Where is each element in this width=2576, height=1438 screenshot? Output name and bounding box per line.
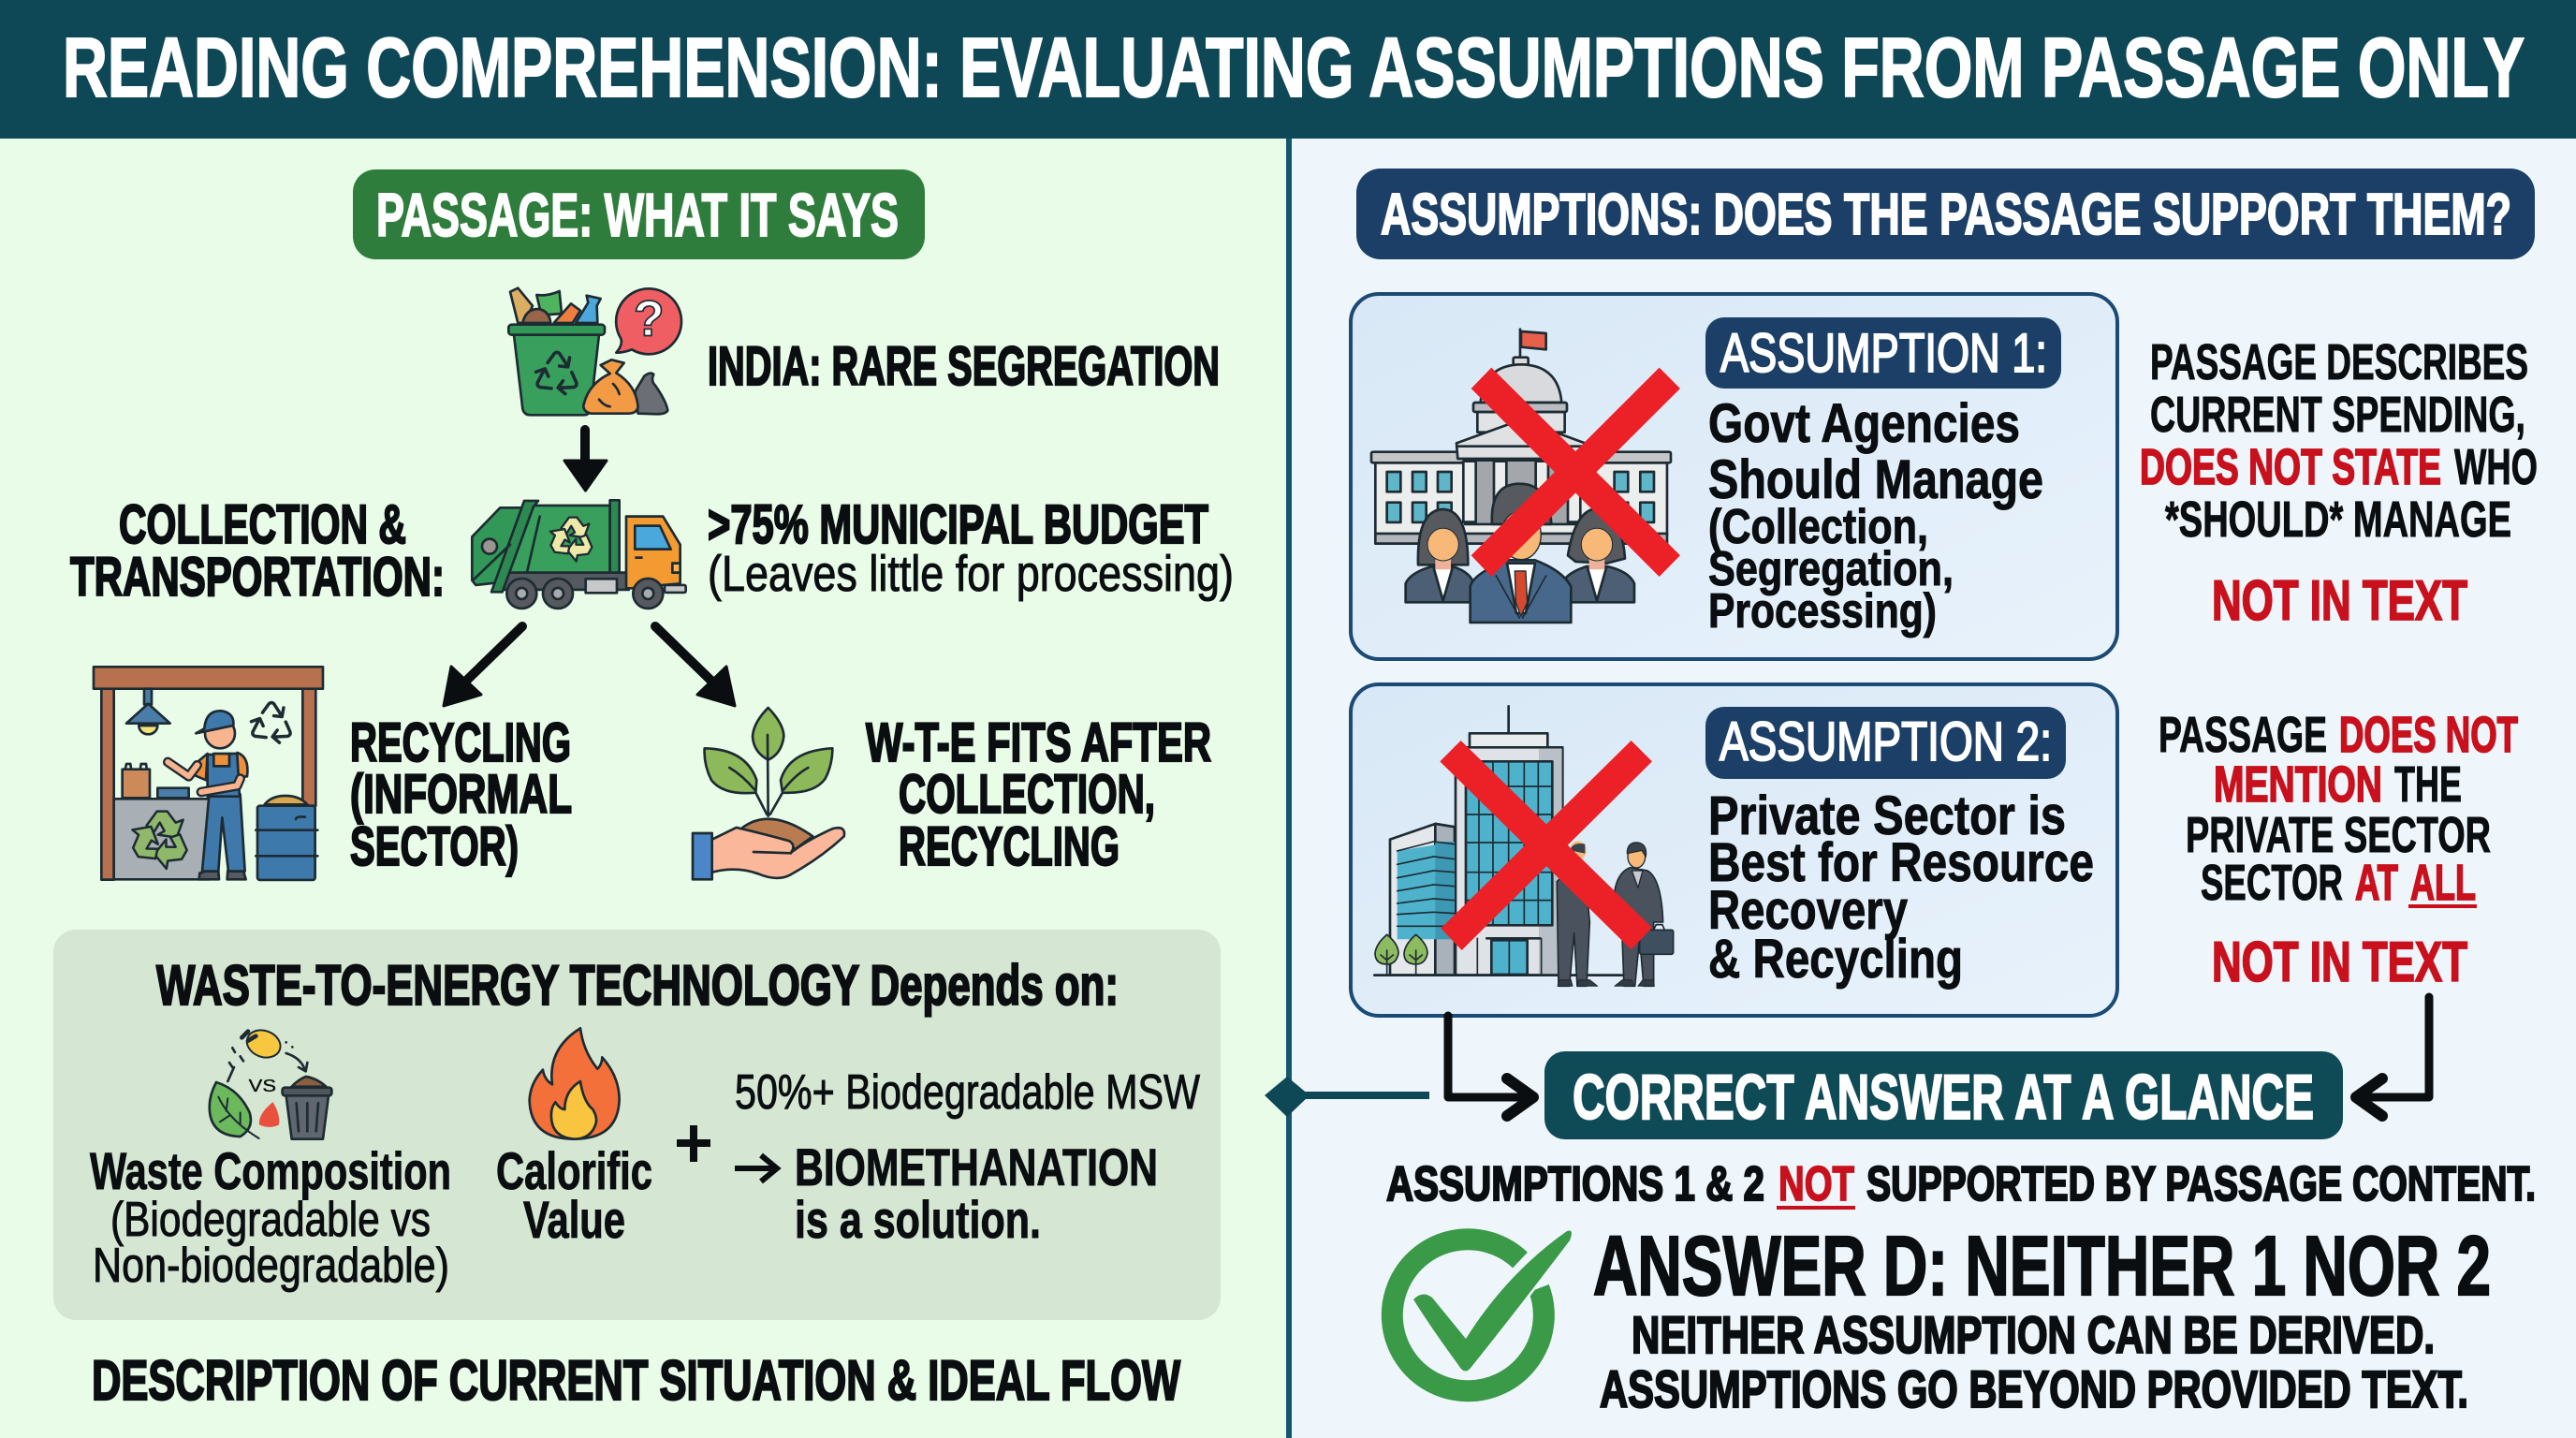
text: recycling informal sector: RECYCLING — [350, 712, 571, 773]
card: assumption 2 — [1351, 684, 2117, 1016]
text: answer explanation — [1600, 1305, 2468, 1418]
text: verdict on assumption 2: AT — [2355, 855, 2398, 911]
text: verdict on assumption 1: WHO — [2454, 439, 2538, 495]
label: collection and transportation — [70, 494, 445, 608]
text: municipal budget — [708, 494, 1234, 602]
text: assumptions not supported — [1386, 1157, 2536, 1211]
panel: assumptions — [1351, 169, 2538, 1418]
badge: assumption 1 — [1705, 317, 2061, 389]
text: verdict on assumption 2: SECTOR — [2201, 855, 2343, 911]
text: biomethanation solution: is a solution. — [795, 1190, 1041, 1249]
text: assumption 2 statement — [1708, 785, 2094, 990]
heading: waste-to-energy depends on: WASTE-TO-ENERGY TECHNOLOGY Depends on: — [156, 954, 1119, 1017]
text: recycling informal sector: SECTOR) — [350, 816, 519, 877]
text: assumption 2 statement: Private Sector is — [1708, 785, 2066, 846]
passage heading — [353, 169, 925, 259]
icon: government building and officials, crossed out — [1371, 330, 1680, 623]
text: calorific value: Value — [523, 1190, 625, 1249]
text: assumptions not supported: NOT — [1778, 1157, 1854, 1211]
text: waste composition: (Biodegradable vs — [110, 1193, 431, 1247]
arrow: assumption 1 card to answer — [1448, 1016, 1533, 1116]
text: calorific value — [496, 1141, 652, 1249]
text: biomethanation solution — [795, 1137, 1158, 1249]
text: assumption 1 statement: (Collection, — [1708, 500, 1928, 554]
text: municipal budget: >75% MUNICIPAL BUDGET — [708, 494, 1208, 555]
text: waste-to-energy fits after: W-T-E FITS AFTER — [866, 712, 1211, 773]
text: assumption 2 statement: Recovery — [1708, 880, 1908, 941]
icon: waste bin with question bubble — [508, 288, 681, 415]
arrow: bin to truck — [564, 425, 607, 491]
icon: green check mark — [1392, 1230, 1572, 1391]
text: verdict on assumption 2: PASSAGE — [2159, 707, 2327, 763]
arrow: to biomethanation — [735, 1155, 777, 1181]
heading: correct answer at a glance — [1544, 1051, 2343, 1139]
text: verdict on assumption 1 — [2140, 334, 2538, 632]
passage heading: PASSAGE: WHAT IT SAYS — [376, 181, 899, 249]
text: verdict on assumption 2 — [2159, 707, 2518, 993]
text: calorific value: Calorific — [496, 1141, 652, 1200]
icon: waste bin with question bubble: ? — [634, 291, 665, 346]
text: waste composition — [90, 1141, 451, 1293]
text: verdict on assumption 2: ALL — [2410, 855, 2476, 911]
text: waste-to-energy fits after — [866, 712, 1211, 877]
central divider with diamond connector — [1265, 139, 1429, 1438]
icon: flame — [530, 1028, 620, 1139]
text: verdict on assumption 2: THE — [2394, 756, 2462, 813]
text: verdict on assumption 2: MENTION — [2214, 756, 2382, 813]
red cross — [1471, 368, 1680, 577]
not in text tag: NOT IN TEXT — [2212, 569, 2467, 632]
text: assumption 2 statement: & Recycling — [1708, 929, 1963, 990]
red cross — [1440, 741, 1652, 950]
arrow: truck to recycling — [444, 626, 522, 706]
badge: assumption 2 — [1705, 707, 2066, 779]
text: municipal budget: (Leaves little for processing) — [708, 546, 1234, 602]
assumptions heading — [1356, 169, 2535, 259]
title banner — [0, 0, 2576, 139]
text: assumption 1 statement: Should Manage — [1708, 449, 2043, 510]
text: assumption 1 statement — [1708, 393, 2043, 638]
panel: waste-to-energy technology — [53, 930, 1221, 1320]
text: recycling informal sector: (INFORMAL — [350, 764, 572, 825]
label: collection and transportation: TRANSPORTATION: — [70, 547, 445, 608]
icon: biodegradable vs non-biodegradable: VS — [249, 1076, 276, 1095]
text: waste composition: Waste Composition — [90, 1141, 451, 1200]
badge: assumption 2: ASSUMPTION 2: — [1720, 712, 2052, 772]
label: collection and transportation: COLLECTION & — [119, 494, 406, 555]
badge: assumption 1: ASSUMPTION 1: — [1720, 323, 2047, 384]
icon: biodegradable vs non-biodegradable — [210, 1026, 331, 1139]
text: assumptions not supported: ASSUMPTIONS 1 & 2 — [1386, 1157, 1764, 1211]
text: biodegradable MSW threshold: 50%+ Biodegradable MSW — [735, 1065, 1200, 1120]
text: waste-to-energy fits after: COLLECTION, — [899, 764, 1155, 825]
text: biomethanation solution: BIOMETHANATION — [795, 1137, 1158, 1196]
text: assumption 1 statement: Segregation, — [1708, 542, 1954, 596]
icon: corporate office and businessmen, crossed out — [1374, 706, 1674, 986]
icon: garbage truck — [472, 500, 686, 609]
card: assumption 1 — [1351, 294, 2117, 659]
arrow: verdict to answer — [2356, 997, 2429, 1116]
text: india rare segregation: INDIA: RARE SEGREGATION — [708, 336, 1220, 397]
text: verdict on assumption 1: DOES NOT STATE — [2140, 439, 2441, 495]
arrow: truck to waste-to-energy — [655, 626, 735, 706]
not in text tag: NOT IN TEXT — [2212, 931, 2467, 993]
text: waste-to-energy fits after: RECYCLING — [899, 816, 1120, 877]
text: assumption 1 statement: Processing) — [1708, 584, 1937, 638]
panel: passage — [53, 169, 1234, 1412]
text: assumption 1 statement: Govt Agencies — [1708, 393, 2020, 454]
text: description footer: DESCRIPTION OF CURRENT SITUATION & IDEAL FLOW — [92, 1349, 1180, 1412]
text: recycling informal sector — [350, 712, 572, 877]
text: waste composition: Non-biodegradable) — [93, 1239, 449, 1293]
icon: seedling in hand — [693, 708, 844, 879]
icon: informal recycling stall — [94, 667, 323, 880]
text: assumption 2 statement: Best for Resource — [1708, 832, 2094, 893]
icon: plus sign — [677, 1125, 710, 1162]
